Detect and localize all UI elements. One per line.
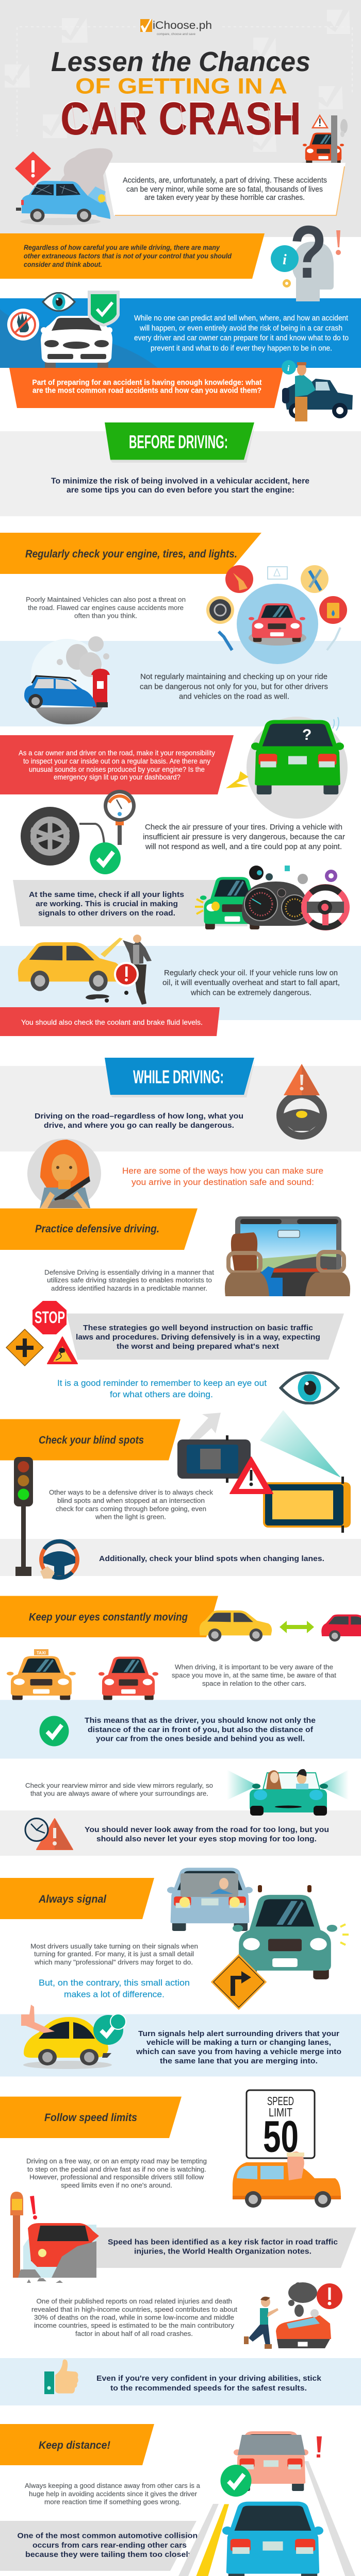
text: published reports: One of their published reports on road related injuries and death: [36, 2297, 232, 2305]
heading: eyes moving: Keep your eyes constantly moving: [29, 1612, 188, 1623]
panel: orange callout: [0, 233, 265, 279]
panel: keep your eyes moving: [0, 1596, 218, 1637]
text: oil: oil, it will eventually overheat and start to fall apart,: [162, 979, 340, 987]
icon: eye: [43, 293, 75, 311]
text: confident: [96, 2374, 322, 2393]
text: lights check: At the same time, check if all your lights: [29, 890, 184, 899]
icon: stop hand: [7, 309, 39, 341]
text: distance: [85, 1716, 316, 1743]
icon: traffic light: [14, 1457, 33, 1576]
panel: before driving: [0, 422, 361, 516]
logo: compare, choose and save: [157, 33, 196, 36]
panel: check blind spots: [0, 1419, 180, 1460]
heading badge: before driving: BEFORE DRIVING:: [129, 431, 228, 452]
text: confident: Even if you're very confident in your driving abilities, stick: [96, 2374, 322, 2383]
logo: iChoose.ph: [153, 20, 212, 31]
icon: car lights and dashboard: [195, 866, 347, 929]
text: awareness of space: space in relation to the other cars.: [202, 1680, 306, 1687]
icon: big eye: [281, 1372, 338, 1403]
text: blind spots body: [49, 1488, 213, 1521]
text: free way: [26, 2157, 207, 2189]
panel: while driving: [0, 1058, 361, 1151]
text: rearview mirror: that you are always aware of where your surroundings are.: [30, 1790, 208, 1797]
text: additionally: Additionally, check your blind spots when changing lanes.: [99, 1554, 324, 1563]
text: most drivers: [30, 1942, 198, 1966]
text: responsibility: to inspect your car inside out on a regular basis. Are there any: [23, 757, 210, 765]
text: rear-ending: occurs from cars rear-ending other cars: [32, 2541, 187, 2550]
text: not regularly maintaining: and vehicles on the road as well.: [179, 692, 289, 701]
text: rearview mirror: Check your rearview mirror and side view mirrors regularly, so: [25, 1782, 213, 1789]
text: poorly maintained: often than you think.: [74, 612, 137, 619]
text: strategies: These strategies go well beyond instruction on basic traffic: [83, 1324, 313, 1332]
icon: steering wheel with hand: [40, 1541, 77, 1579]
icon: man with pickup truck: i: [287, 364, 290, 373]
text: callout: [24, 243, 232, 268]
text: not regularly maintaining: can be dangerous not only for you, but for other drivers: [140, 683, 328, 691]
text: awareness of space: [172, 1663, 336, 1687]
text: small action: But, on the contrary, this small action: [39, 1978, 190, 1988]
panel: turn signals: [0, 2005, 361, 2076]
panel: blue band: [0, 291, 361, 368]
icon: crashed orange car at pole: [300, 115, 348, 167]
text: strategies: [76, 1324, 320, 1351]
text: lights check: [29, 890, 184, 918]
text: speed key risk: injuries, the World Health Organization notes.: [134, 2247, 311, 2256]
text: published reports: 30% of deaths on the road, while in some low-income and middle: [34, 2313, 234, 2321]
text: published reports: income countries, speed is estimated to be the main contributory: [34, 2321, 235, 2329]
text: defensive driving definition: utilizes safe driving strategies to enables motorists to: [47, 1276, 212, 1284]
text: responsibility: unusual sounds or noises produced by your engine? Is the: [29, 765, 205, 773]
icon: tire pressure gauge: [21, 790, 136, 874]
text: oil: Regularly check your oil. If your vehicle runs low on: [164, 969, 338, 977]
title: Lessen the Chances: [51, 46, 310, 77]
panel: practice defensive driving: [0, 1209, 198, 1250]
text: blind spots body: Other ways to be a defensive driver is to always check: [49, 1488, 213, 1496]
text: keep an eye out: It is a good reminder to remember to keep an eye out: [57, 1378, 267, 1388]
text: while driving intro: [35, 1112, 243, 1130]
icon: head with question mark: ?: [290, 210, 327, 294]
text: speed key risk: [108, 2238, 338, 2256]
text: intro: Accidents, are, unfortunately, a part of driving. These accidents: [123, 176, 327, 184]
title: CAR CRASH: [60, 93, 301, 145]
icon: stop sign: [32, 1301, 67, 1334]
text: air pressure: insufficient air pressure is very dangerous, because the car: [143, 833, 345, 841]
panel: additionally: [0, 1539, 361, 1579]
panel: rear-ending: [0, 2521, 202, 2571]
text: free way: speed limits even if no one's around.: [61, 2181, 172, 2189]
text: good distance: [25, 2482, 201, 2506]
text: keep an eye out: for what others are doing.: [110, 1389, 213, 1399]
text: poorly maintained: Poorly Maintained Vehicles can also post a threat on: [26, 596, 186, 603]
icon: car interior with driver: [225, 1216, 350, 1296]
text: blind spots body: when the light is green.: [95, 1513, 166, 1521]
text: rearview mirror: [25, 1782, 213, 1797]
text: published reports: revealed that in high-income countries, speed contributes to about: [31, 2306, 237, 2313]
icon: blue-grey car with driver: [167, 1868, 253, 1931]
text: here are some ways: you arrive in your destination safe and sound:: [132, 1177, 314, 1187]
icon: road with two cars keeping distance: [174, 2431, 361, 2576]
panel: keep distance: [0, 2424, 154, 2465]
icon: stop sign: STOP: [35, 1308, 65, 1327]
text: never look away: You should never look away from the road for too long, but you: [85, 1825, 329, 1834]
panel: orange-red knowledge callout: [9, 368, 284, 408]
text: most drivers: Most drivers usually take turning on their signals when: [30, 1942, 198, 1950]
heading: regularly check: Regularly check your engine, tires, and lights.: [25, 548, 237, 560]
text: not regularly maintaining: [140, 673, 328, 701]
text: speed key risk: Speed has been identified as a key risk factor in road traffic: [108, 2238, 338, 2246]
text: never look away: [85, 1825, 329, 1843]
text: turn signals: [136, 2029, 341, 2065]
text: distance: This means that as the driver, you should know not only the: [85, 1716, 316, 1725]
heading: always signal: Always signal: [38, 1893, 107, 1905]
text: air pressure: Check the air pressure of your tires. Driving a vehicle with: [145, 823, 342, 832]
text: oil: [162, 969, 340, 997]
panel: header: [0, 0, 361, 237]
text: awareness of space: space you move in, at the same time, be aware of that: [172, 1671, 336, 1679]
text: callout: consider and think about.: [24, 260, 102, 268]
text: turn signals: which can save you from having a vehicle merge into: [136, 2047, 341, 2056]
text: before driving intro: To minimize the risk of being involved in a vehicular accident, here: [51, 477, 309, 485]
text: defensive driving definition: address identified hazards in a predictable manner.: [51, 1284, 207, 1292]
text: most drivers: which many "professional" drivers may forget to do.: [34, 1958, 193, 1966]
text: never look away: should also never let your eyes stop moving for too long.: [96, 1835, 317, 1843]
text: most drivers: turning for granted. For many, it is just a small detail: [34, 1950, 194, 1958]
icon: warning triangle and steering wheel: [280, 1064, 323, 1136]
text: distance: your car from the ones beside and behind you as well.: [96, 1734, 305, 1743]
text: knowledge: are the most common road accidents and how can you avoid them?: [32, 386, 261, 395]
heading: blind spots: Check your blind spots: [39, 1434, 144, 1446]
text: good distance: Always keeping a good distance away from other cars is a: [25, 2482, 201, 2489]
icon: smashed blue car with warning diamond: [16, 148, 112, 225]
text: here are some ways: Here are some of the ways how you can make sure: [122, 1166, 323, 1176]
text: rear-ending: One of the most common automotive collisions: [18, 2532, 202, 2540]
heading: speed limits: Follow speed limits: [44, 2112, 137, 2124]
text: responsibility: As a car owner and driver on the road, make it your responsibility: [19, 749, 215, 757]
text: responsibility: [19, 749, 215, 781]
heading: keep distance: Keep distance!: [39, 2439, 110, 2451]
text: rear-ending: [18, 2532, 202, 2559]
icon: teal car with mirror beams and passengers: [227, 1769, 349, 1816]
panel: red responsibility callout: [0, 735, 234, 794]
text: small action: makes a lot of difference.: [64, 1990, 165, 1999]
icon: orange car with happy driver: [233, 2151, 341, 2208]
text: turn signals: vehicle will be making a turn or changing lanes,: [146, 2038, 331, 2047]
text: callout: other extraneous factors that is not of your control that you should: [24, 251, 232, 260]
text: blue band: will happen, or even entirely avoid the risk of being in a car crash: [139, 324, 342, 333]
text: free way: to step on the pedal and drive fast as if no one is watching.: [27, 2165, 206, 2173]
panel: strategies: [67, 1314, 344, 1360]
text: intro: can be very minor, while some are so fatal, thousands of lives: [126, 185, 323, 194]
icon: green car rear with grey oval: ?: [302, 726, 311, 743]
icon: teal suv with signal: [233, 1885, 349, 1979]
text: blue band: prevent it and what to do if ever they happen to be in one.: [151, 344, 332, 352]
icon: head with question mark: [271, 210, 341, 301]
text: confident: to the recommended speeds for the safest results.: [110, 2384, 307, 2393]
text: knowledge: Part of preparing for an accident is having enough knowledge: what: [32, 379, 262, 387]
text: responsibility: emergency sign lit up on your dashboard?: [54, 773, 180, 781]
text: not regularly maintaining: Not regularly maintaining and checking up on your ride: [140, 673, 327, 681]
icon: taxi front: TAXI: [37, 1651, 46, 1655]
text: air pressure: will not respond as well, and a tire could pop at any point.: [145, 843, 342, 851]
icon: head with question mark: i: [283, 252, 287, 268]
text: blue band: every driver and car owner can prepare for it and know what to do to: [134, 334, 349, 342]
logo: [140, 19, 212, 36]
icon: green shield: [88, 291, 120, 327]
panel: confident: [0, 2358, 361, 2405]
icon: cars with distance arrow: [200, 1611, 361, 1641]
panel: light blue maintenance band: [0, 641, 361, 726]
text: poorly maintained: the road. Flawed car engines cause accidents more: [28, 604, 184, 612]
icon: right turn road sign: [211, 1955, 266, 2009]
text: good distance: huge help in avoiding accidents since it gives the driver: [29, 2490, 198, 2498]
text: strategies: the worst and being prepared what's next: [117, 1342, 279, 1351]
panel: intro white card: [104, 163, 346, 215]
text: turn signals: the same lane that you are merging into.: [160, 2057, 318, 2065]
panel: red coolant callout: [0, 1007, 220, 1036]
icon: red car front: [99, 1657, 158, 1700]
icon: man with pickup truck: [282, 360, 353, 421]
text: poorly maintained: [26, 596, 186, 619]
text: blue band: [134, 314, 349, 352]
text: free way: Driving on a free way, or on an empty road may be tempting: [26, 2157, 207, 2165]
text: coolant: You should also check the coolant and brake fluid levels.: [21, 1018, 203, 1026]
text: knowledge: [32, 379, 262, 395]
text: good distance: more reaction time if something goes wrong.: [44, 2498, 181, 2506]
panel: never look away: [0, 1810, 361, 1856]
icon: red car crashed into wall with street lamp: [10, 2192, 99, 2283]
title: OF GETTING IN A: [75, 74, 287, 99]
text: published reports: factor in about half of all road crashes.: [75, 2330, 193, 2337]
text: intro: [123, 176, 327, 202]
icon: green car rear with grey oval: [226, 717, 348, 819]
text: here are some ways: [122, 1166, 323, 1187]
icon: speed limit sign: SPEED: [267, 2094, 294, 2108]
text: strategies: laws and procedures. Driving defensively is in a way, expecting: [76, 1333, 320, 1342]
panel: regularly check: [0, 533, 261, 574]
icon: speed limit sign: LIMIT: [269, 2106, 292, 2119]
panel: always signal: [0, 1878, 154, 1919]
icon: blue car hitting red post box: [24, 636, 110, 724]
text: lights check: signals to other drivers on the road.: [38, 909, 175, 918]
text: intro: are taken every year by these horrible car crashes.: [144, 194, 305, 202]
panel: follow speed limits: [0, 2097, 182, 2138]
icon: car with tools: [206, 565, 347, 664]
icon: crossroad sign: [6, 1329, 43, 1366]
icon: thumbs up: [44, 2359, 78, 2394]
icon: green check: [39, 1716, 69, 1747]
icon: white car front: [41, 316, 112, 368]
text: lights check: are working. This is crucial in making: [36, 900, 178, 908]
icon: man running from smoking wreck: [244, 2282, 342, 2349]
icon: taxi front: [7, 1649, 76, 1700]
text: defensive driving definition: [44, 1268, 214, 1292]
text: before driving intro: are some tips you can do even before you start the engine:: [67, 486, 294, 495]
icon: slippery road sign: [47, 1337, 77, 1364]
heading: defensive driving: Practice defensive driving.: [35, 1223, 159, 1235]
panel: lights check: [13, 880, 248, 926]
text: air pressure: [143, 823, 345, 851]
icon: speed limit sign: 50: [263, 2112, 299, 2162]
heading badge: before driving: [105, 422, 254, 460]
text: keep an eye out: [57, 1378, 267, 1399]
heading badge: while driving: [105, 1058, 254, 1095]
text: before driving intro: [51, 477, 309, 495]
text: oil: which can be extremely dangerous.: [190, 989, 311, 997]
icon: woman driver with seatbelt: [27, 1139, 101, 1208]
panel: speed key risk: [89, 2228, 356, 2268]
text: published reports: [31, 2297, 237, 2337]
icon: speed limit sign: [247, 2090, 315, 2162]
icon: blind spot cars from above: [177, 1410, 351, 1533]
text: small action: [39, 1978, 190, 1999]
text: blue band: While no one can predict and tell when, where, and how an accident: [134, 314, 349, 323]
text: blind spots body: blind spots and when stopped at an intersection: [57, 1497, 205, 1504]
text: free way: However, professional and responsible drivers still follow: [29, 2173, 204, 2181]
title: [51, 46, 310, 145]
panel: you should know distance: [0, 1700, 361, 1759]
icon: yellow car with thumb and check: [21, 2005, 126, 2069]
text: while driving intro: Driving on the road–regardless of how long, what you: [35, 1112, 243, 1121]
text: callout: Regardless of how careful you are while driving, there are many: [24, 243, 220, 251]
text: while driving intro: drive, and where you go can really be dangerous.: [44, 1121, 234, 1130]
panel: oil check: [0, 935, 361, 1020]
text: awareness of space: When driving, it is important to be very aware of the: [175, 1663, 333, 1671]
icon: yellow car with raised hood and mechanic: [18, 935, 152, 1005]
icon: clock and warning triangle: [25, 1819, 73, 1850]
text: blind spots body: check for cars coming through before going, even: [56, 1505, 206, 1513]
text: distance: distance of the car in front of you, but also the distance of: [88, 1725, 314, 1734]
text: defensive driving definition: Defensive Driving is essentially driving in a manner that: [44, 1268, 214, 1276]
text: turn signals: Turn signals help alert surrounding drivers that your: [138, 2029, 339, 2038]
text: rear-ending: because they were tailing them too closely.: [25, 2550, 194, 2559]
heading badge: while driving: WHILE DRIVING:: [133, 1066, 224, 1087]
